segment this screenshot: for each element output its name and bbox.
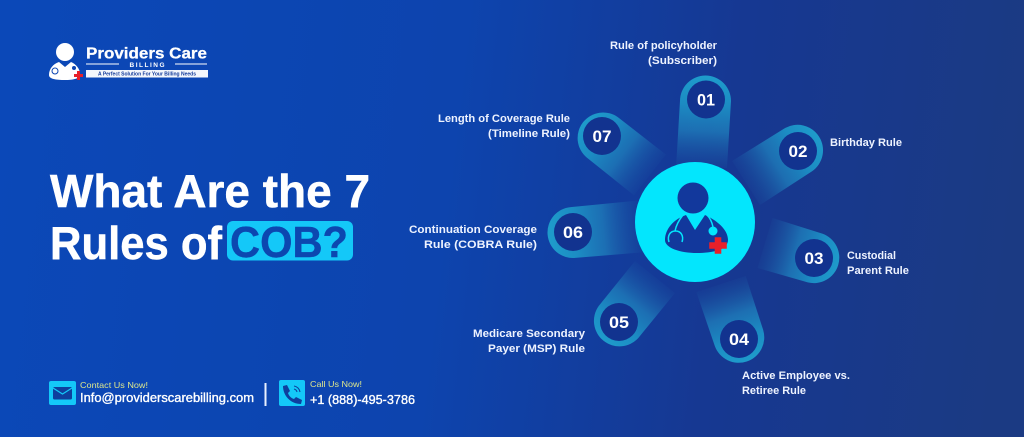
label: rule 07 [438, 113, 570, 140]
title [50, 165, 370, 269]
email address: Info@providerscarebilling.com [80, 390, 254, 405]
logo wordmark: Providers Care [86, 46, 207, 62]
logo tagline: A Perfect Solution For Your Billing Needs [98, 72, 196, 78]
label: rule 06: Rule (COBRA Rule) [424, 239, 537, 251]
label: rule 05: Payer (MSP) Rule [488, 343, 585, 355]
label: rule 04 [742, 370, 850, 397]
label: rule 06 [409, 224, 537, 251]
rule 07 spoke [578, 112, 666, 195]
label: rule 03: Parent Rule [847, 265, 909, 277]
rule 01 spoke: 01 [697, 90, 715, 110]
rule 06 spoke [547, 201, 642, 258]
radial diagram [547, 76, 839, 363]
label: rule 03 [847, 250, 909, 277]
COB text: COB? [230, 218, 348, 267]
rule 03 spoke: 03 [804, 249, 824, 268]
phone number: +1 (888)-495-3786 [310, 392, 415, 407]
rule 02 spoke: 02 [788, 142, 808, 161]
rule 03 spoke [758, 218, 839, 283]
contact: email [49, 380, 254, 405]
label: rule 03: Custodial [847, 250, 896, 262]
label: rule 05 [473, 328, 586, 355]
rule 04 spoke [696, 276, 764, 363]
label: rule 07: Length of Coverage Rule [438, 113, 570, 125]
rule 06 spoke: 06 [563, 223, 583, 242]
label: rule 02: Birthday Rule [830, 137, 902, 149]
label: rule 05: Medicare Secondary [473, 328, 586, 340]
label: rule 01 [610, 40, 718, 67]
central cyan hub [635, 162, 755, 282]
rule 04 spoke: 04 [729, 330, 750, 349]
label: rule 01: Rule of policyholder [610, 40, 718, 52]
rule 02 spoke [732, 125, 823, 205]
icon: doctor [665, 182, 728, 254]
label: rule 04: Retiree Rule [742, 385, 806, 397]
contact: phone [279, 379, 415, 407]
label: rule 01: (Subscriber) [648, 55, 717, 67]
title line 2: Rules of [50, 217, 223, 269]
icon: logo doctor [49, 43, 83, 80]
rule 05 spoke [594, 261, 675, 346]
phone heading: Call Us Now! [310, 379, 362, 389]
label: rule 07: (Timeline Rule) [488, 128, 570, 140]
COB highlight box [227, 221, 353, 260]
logo: Providers Care Billing [49, 43, 208, 80]
email heading: Contact Us Now! [80, 380, 148, 390]
label: rule 06: Continuation Coverage [409, 224, 537, 236]
logo tagline bar [86, 70, 208, 78]
logo rule left [86, 64, 119, 65]
rule 01 spoke [676, 76, 731, 168]
label: rule 04: Active Employee vs. [742, 370, 850, 382]
icon: phone [279, 380, 305, 406]
rule 05 spoke: 05 [609, 313, 629, 332]
logo rule right [175, 64, 207, 65]
contact divider [264, 383, 266, 406]
title line 1: What Are the 7 [50, 165, 370, 217]
rule 07 spoke: 07 [592, 127, 612, 146]
logo subtitle: BILLING [130, 62, 164, 69]
icon: envelope [49, 381, 76, 405]
